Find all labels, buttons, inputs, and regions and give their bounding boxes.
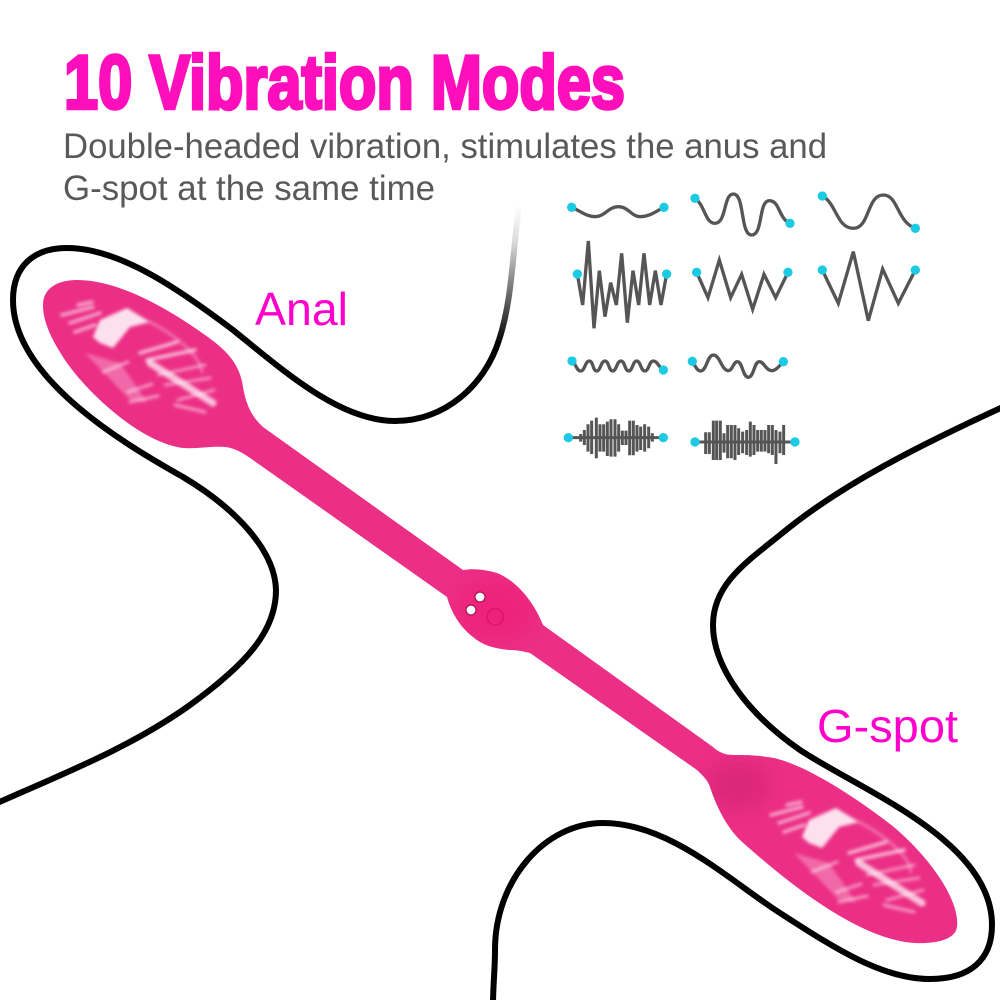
label: Anal: Anal xyxy=(255,283,348,335)
subtitle text: G-spot at the same time xyxy=(63,169,435,208)
wave 7 xyxy=(567,356,668,375)
product: double-headed device xyxy=(43,280,957,943)
wave 4 xyxy=(573,241,671,328)
subtitle text: Double-headed vibration, stimulates the anus and xyxy=(63,127,827,166)
vibration mode wave icons xyxy=(564,191,920,464)
wave 3 xyxy=(818,191,920,233)
shading near right neck xyxy=(455,578,770,809)
right head internal blur xyxy=(771,802,923,912)
label: G-spot: G-spot xyxy=(817,700,958,752)
power symbol xyxy=(487,609,503,625)
left head internal blur xyxy=(62,302,214,412)
left black cable xyxy=(0,205,519,804)
subtitle text xyxy=(63,127,827,208)
right black cable xyxy=(493,406,1000,1000)
title: 10 Vibration Modes xyxy=(64,40,625,125)
wave 9 xyxy=(564,418,668,458)
device body silhouette xyxy=(43,280,957,943)
cable fading tail xyxy=(499,205,519,340)
wave 5 xyxy=(692,260,793,309)
wave 6 xyxy=(818,252,920,321)
button holes xyxy=(466,592,485,615)
wave 8 xyxy=(688,355,788,377)
wave 10 xyxy=(690,421,800,464)
wave 2 xyxy=(690,194,795,235)
wave 1 xyxy=(567,203,669,217)
